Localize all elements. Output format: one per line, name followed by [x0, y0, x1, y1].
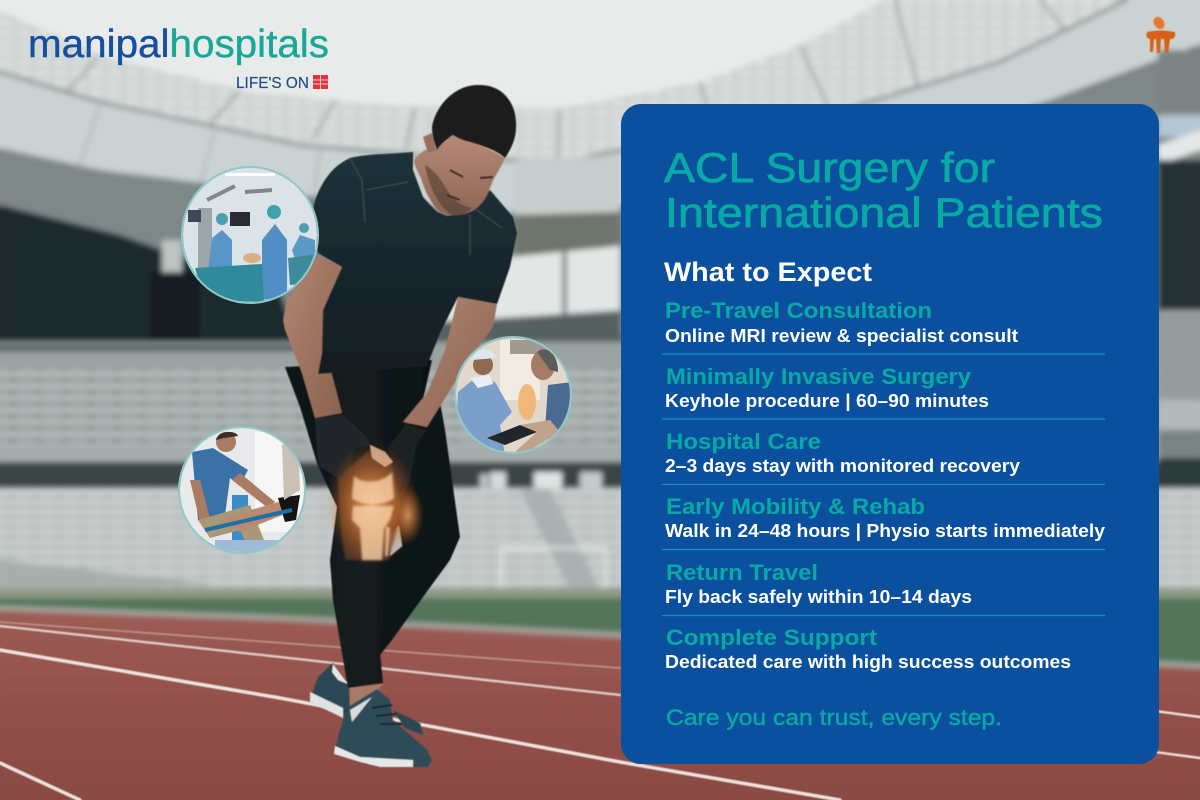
hair: [432, 85, 516, 158]
step: early mobility and rehab: Walk in 24–48 hours | Physio starts immediately: [665, 521, 1105, 541]
athlete figure: [283, 85, 517, 767]
roof trusses: [60, 0, 1070, 160]
step: complete support: [665, 625, 1071, 672]
step: early mobility and rehab: Early Mobility & Rehab: [666, 494, 925, 519]
therapist: [192, 448, 248, 520]
sky: [0, 0, 1200, 300]
icon: back shoe: [310, 663, 423, 735]
under-roof band: [0, 46, 1200, 350]
drape table: [195, 264, 264, 302]
knee glow: [326, 443, 418, 567]
stubble: [425, 165, 472, 215]
icon: orange corner mark: [1146, 15, 1175, 53]
wordmark: manipalhospitals: [28, 23, 329, 66]
surgeon left: [208, 230, 232, 268]
dividers: [662, 354, 1105, 616]
knee skin: [338, 450, 400, 560]
tagline: LIFE'S ON: [236, 75, 309, 92]
step: pre-travel consultation: Pre-Travel Consultation: [665, 298, 932, 323]
mid tier stands: [0, 342, 620, 370]
t-shirt: [312, 152, 517, 374]
photo inset: doctor consultation: [455, 337, 572, 455]
photo inset: physiotherapy: [178, 427, 308, 553]
logo: Manipal Hospitals: [28, 23, 329, 92]
left glove: [315, 415, 370, 478]
closing line: Care you can trust, every step.: [666, 705, 1002, 730]
surgeon center: [262, 224, 287, 300]
track lane lines: [0, 622, 1200, 800]
ankle skin: [350, 684, 383, 708]
step: pre-travel consultation: Online MRI review & specialist consult: [665, 326, 1018, 346]
brow, eyes and mouth: [447, 170, 493, 200]
patient leg and band: [224, 502, 283, 532]
right arm: [403, 297, 497, 427]
track: [0, 610, 1200, 800]
step: minimally invasive surgery: Keyhole procedure | 60–90 minutes: [665, 391, 989, 411]
step: pre-travel consultation: [665, 298, 1018, 346]
right watch and glove: [388, 424, 427, 503]
dark concourse left: [0, 205, 300, 352]
step: hospital care: Hospital Care: [666, 429, 821, 454]
face: [414, 135, 505, 215]
lower tier stands: [0, 488, 1200, 590]
assistant: [292, 235, 315, 265]
step: minimally invasive surgery: Minimally Invasive Surgery: [666, 364, 972, 389]
icon: red cross badge: [313, 75, 328, 89]
icon: front shoe: [334, 689, 432, 767]
step: minimally invasive surgery: [665, 364, 989, 411]
knee bones: [352, 472, 394, 560]
title: ACL Surgery for: [664, 144, 995, 191]
front leg tights: [285, 360, 432, 688]
step: complete support: Dedicated care with high success outcomes: [665, 652, 1071, 672]
photo inset: operating room: [180, 165, 320, 305]
roof fascia: [0, 0, 1200, 216]
step: return travel: [665, 560, 972, 607]
goal post: [501, 548, 606, 590]
dark strip between tiers: [0, 462, 1200, 492]
step: return travel: Fly back safely within 10–14 days: [665, 587, 972, 607]
panel background: [621, 104, 1159, 764]
tablet: [487, 425, 537, 445]
panel: what to expect: [621, 104, 1159, 764]
title: International Patients: [665, 189, 1103, 236]
bright gallery: [440, 246, 620, 322]
grass field: [0, 590, 1200, 668]
patient: [546, 382, 570, 432]
step: complete support: Complete Support: [666, 625, 878, 650]
step: hospital care: 2–3 days stay with monitored recovery: [665, 456, 1020, 476]
gap between legs: [390, 525, 402, 556]
left arm: [283, 255, 342, 418]
title: [664, 144, 1103, 236]
right strip stadium: [1158, 50, 1200, 115]
doctor: [457, 380, 512, 452]
step: hospital care: [665, 429, 1020, 476]
step: return travel: Return Travel: [666, 560, 818, 585]
subheading: What to Expect: [664, 257, 872, 287]
step: early mobility and rehab: [665, 494, 1105, 541]
back leg: [370, 402, 460, 655]
fingers: [370, 445, 393, 467]
OR background: [180, 165, 320, 305]
ear: [423, 133, 436, 153]
stadium roof grid: [0, 0, 1127, 162]
